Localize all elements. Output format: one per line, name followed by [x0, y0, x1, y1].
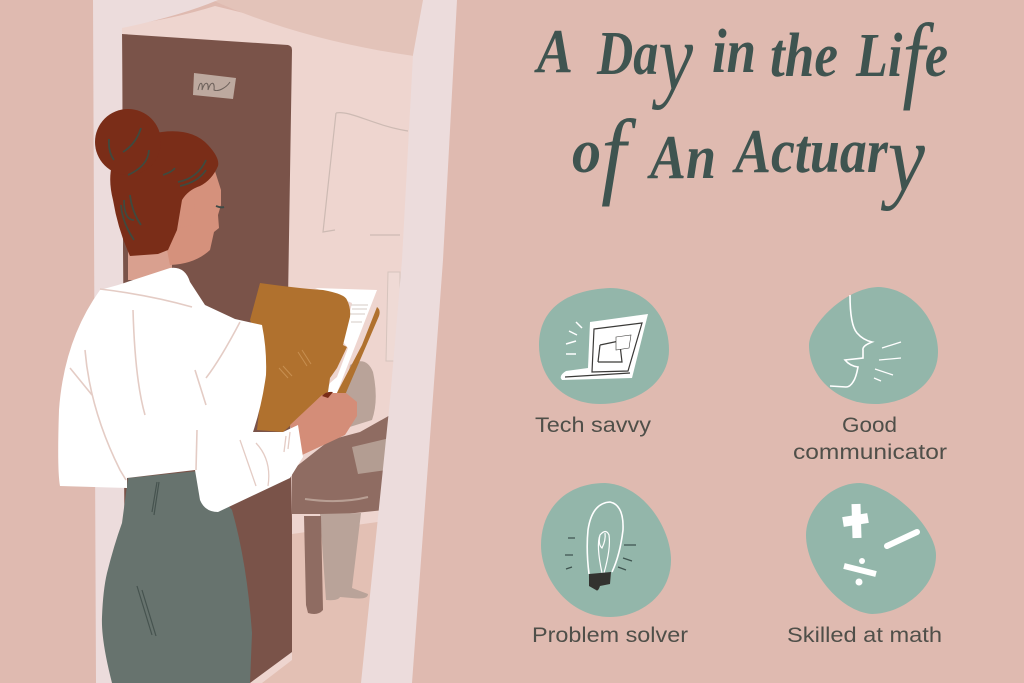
- ear: [180, 194, 195, 228]
- icon: laptop: [561, 314, 648, 380]
- label second line: communicator: [793, 440, 947, 464]
- skirt: [102, 471, 252, 683]
- title: [534, 3, 948, 211]
- floor: [262, 520, 392, 683]
- title word: Life: Li: [856, 22, 911, 90]
- hair strands: [109, 128, 206, 240]
- icon blob: [809, 287, 938, 404]
- fingernail: [322, 392, 333, 398]
- label: Tech savvy: [535, 413, 651, 437]
- skirt creases: [137, 482, 159, 636]
- title word: of: f: [601, 100, 637, 207]
- second wall picture sketch: [386, 272, 400, 361]
- folder scratches: [279, 350, 311, 378]
- title word: A: A: [534, 18, 573, 86]
- colleague near leg: [304, 516, 323, 614]
- title word: Life: f: [902, 4, 934, 111]
- title word: Actuary: y: [880, 104, 925, 211]
- title word: the: the: [770, 22, 838, 90]
- icon: math symbols: [843, 504, 917, 586]
- hand: [290, 393, 357, 456]
- colleague behind door: [292, 361, 392, 614]
- illustration: woman holding folder: [58, 109, 380, 683]
- eyelashes: [216, 206, 224, 207]
- paper text lines: [350, 305, 368, 322]
- icon blob: [806, 483, 936, 614]
- title word: of: o: [572, 118, 603, 186]
- title word: Day: y: [651, 3, 693, 110]
- wall picture frame sketch: [323, 113, 408, 235]
- title word: Life: e: [925, 22, 948, 90]
- hair: [110, 131, 218, 256]
- label: Problem solver: [532, 623, 688, 647]
- panel: tech savvy: [535, 288, 669, 437]
- shirt body: [58, 268, 303, 512]
- ceiling: [212, 0, 425, 56]
- colleague coat pocket line: [305, 497, 368, 501]
- right door frame: [361, 0, 457, 683]
- title word: in: in: [712, 18, 756, 86]
- front folder: [250, 283, 350, 432]
- panel: skilled at math: [787, 483, 942, 647]
- label: Skilled at math: [787, 623, 942, 647]
- panel: office doorway scene: [93, 0, 457, 683]
- title word: Actuary: Actuar: [735, 118, 911, 186]
- icon: speaking profile: [830, 295, 901, 387]
- colleague coat: [292, 414, 392, 514]
- paper sheet: [315, 288, 377, 403]
- icon: light bulb: [565, 502, 636, 590]
- colleague torso: [340, 361, 376, 430]
- title word: An: An: [647, 124, 716, 192]
- back folder flap: [330, 307, 380, 406]
- panel: good communicator: [793, 287, 947, 464]
- icon blob: [539, 288, 669, 404]
- face: [165, 168, 221, 265]
- shirt fold lines: [70, 289, 240, 480]
- door name plate: [193, 73, 236, 99]
- colleague document: [352, 438, 390, 474]
- colleague far leg: [320, 513, 368, 600]
- panel: problem solver: [532, 483, 688, 647]
- title word: Day: Da: [597, 20, 673, 88]
- label: Good: [842, 413, 897, 437]
- door: [122, 34, 292, 683]
- cuff folds: [240, 432, 290, 486]
- neck: [128, 245, 172, 280]
- icon blob: [541, 483, 671, 617]
- left door frame: [93, 0, 218, 683]
- hair bun: [95, 109, 161, 175]
- back wall: [120, 6, 415, 683]
